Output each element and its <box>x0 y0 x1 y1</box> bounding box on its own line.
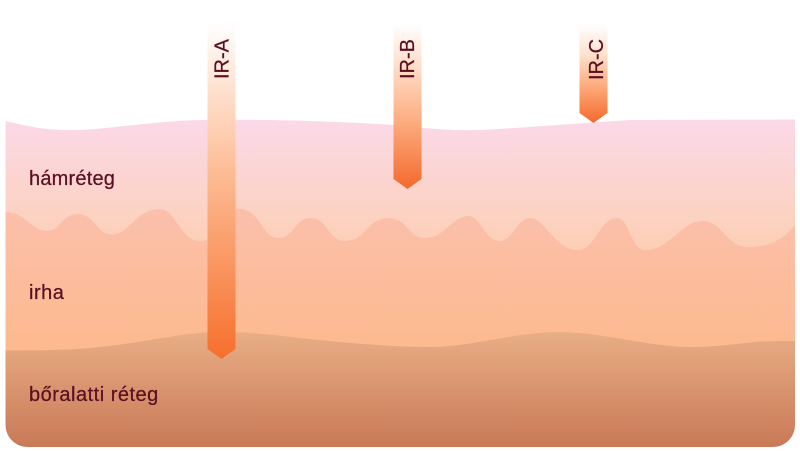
arrow: IR-B <box>394 23 422 189</box>
label: epidermis: hámréteg <box>29 168 115 190</box>
hypodermis layer <box>6 332 795 447</box>
label: dermis: irha <box>29 282 65 304</box>
arrow: IR-C <box>580 23 608 123</box>
epidermis layer <box>6 120 795 260</box>
label: subcutaneous layer: bőralatti réteg <box>29 384 159 406</box>
arrow: IR-B: IR-B <box>397 39 419 79</box>
arrow: IR-A <box>208 23 236 359</box>
dermis layer <box>6 209 795 355</box>
arrow: IR-C: IR-C <box>586 39 608 80</box>
arrow: IR-A: IR-A <box>212 38 234 79</box>
